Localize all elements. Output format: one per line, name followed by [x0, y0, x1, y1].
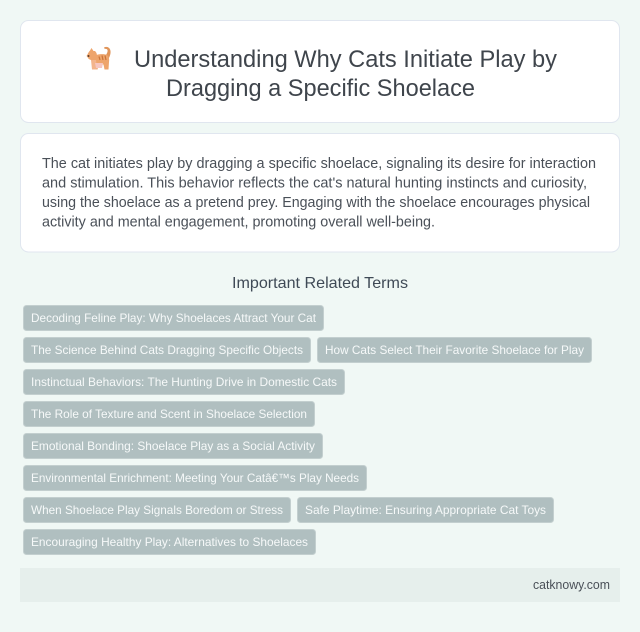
tag: Environmental Enrichment: Meeting Your Catâ€™s Play Needs: [31, 471, 359, 485]
description text: [42, 156, 596, 230]
footer: [20, 568, 620, 602]
tag: Safe Playtime: Ensuring Appropriate Cat Toys: [305, 503, 546, 517]
tag: Decoding Feline Play: Why Shoelaces Attract Your Cat: [31, 311, 317, 325]
tag list: [24, 306, 592, 554]
tag: [24, 402, 314, 426]
heading: important related terms: Important Related Terms: [232, 275, 408, 292]
title: [134, 46, 557, 102]
tag: The Role of Texture and Scent in Shoelace Selection: [31, 407, 307, 421]
tag: [24, 338, 310, 362]
tag: [24, 466, 366, 490]
panel: title card: [20, 20, 620, 122]
tag: [298, 498, 554, 522]
tag: [24, 434, 322, 458]
title: Dragging a Specific Shoelace: [166, 75, 475, 102]
tag: [24, 306, 324, 330]
tag: The Science Behind Cats Dragging Specific Objects: [31, 343, 303, 357]
icon: cat: [86, 47, 111, 70]
tag: [24, 530, 316, 554]
title: Understanding Why Cats Initiate Play by: [134, 46, 557, 73]
tag: When Shoelace Play Signals Boredom or Stress: [31, 503, 283, 517]
description text: The cat initiates play by dragging a specific shoelace, signaling its desire for interaction: [42, 156, 596, 172]
description text: and stimulation. This behavior reflects the cat's natural hunting instincts and curiosity,: [42, 176, 587, 192]
tag: [24, 370, 344, 394]
footer source: catknowy.com: [533, 577, 610, 592]
panel: description card: [20, 134, 620, 252]
description text: activity and mental engagement, promoting overall well-being.: [42, 214, 435, 230]
tag: [24, 498, 290, 522]
tag: Instinctual Behaviors: The Hunting Drive in Domestic Cats: [31, 375, 337, 389]
description text: using the shoelace as a pretend prey. Engaging with the shoelace encourages physical: [42, 195, 590, 211]
tag: How Cats Select Their Favorite Shoelace for Play: [325, 343, 584, 357]
tag: Encouraging Healthy Play: Alternatives to Shoelaces: [31, 535, 308, 549]
tag: Emotional Bonding: Shoelace Play as a Social Activity: [31, 439, 315, 453]
tag: [318, 338, 592, 362]
